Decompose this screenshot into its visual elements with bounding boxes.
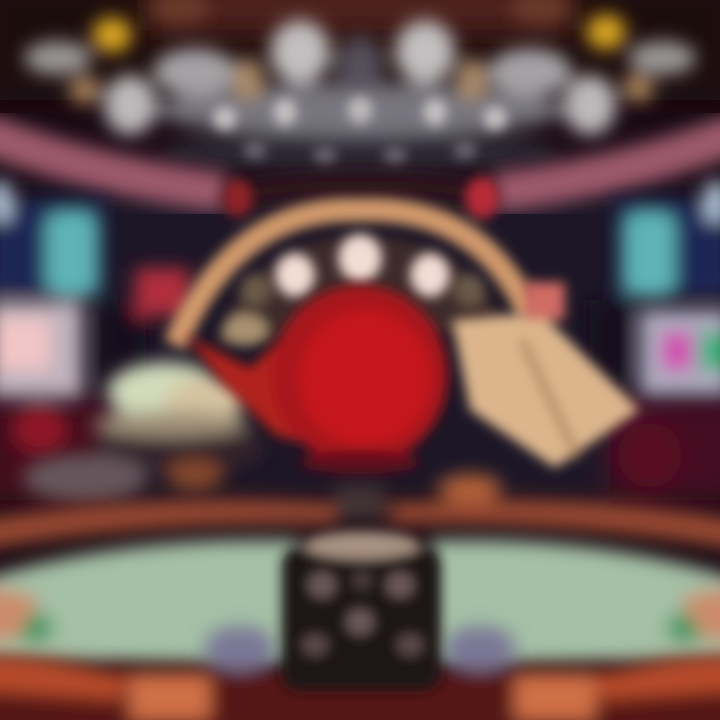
- tan cards: [452, 282, 640, 468]
- pink balcony arcs: [0, 132, 720, 195]
- bottom table rail: [0, 474, 720, 550]
- green table: [0, 540, 720, 665]
- left screens: [0, 182, 190, 454]
- arch interior: [215, 235, 505, 346]
- bottom wood edge: [0, 626, 720, 720]
- chandelier: [24, 0, 696, 174]
- chandelier lower detail: [213, 96, 507, 164]
- red kettle: [185, 285, 448, 474]
- tan arch: [175, 177, 530, 345]
- right screens: [590, 182, 720, 487]
- white dots: [275, 234, 450, 297]
- background: upper hall: [0, 0, 720, 500]
- left plate: [23, 362, 265, 502]
- chip stack: [282, 531, 440, 690]
